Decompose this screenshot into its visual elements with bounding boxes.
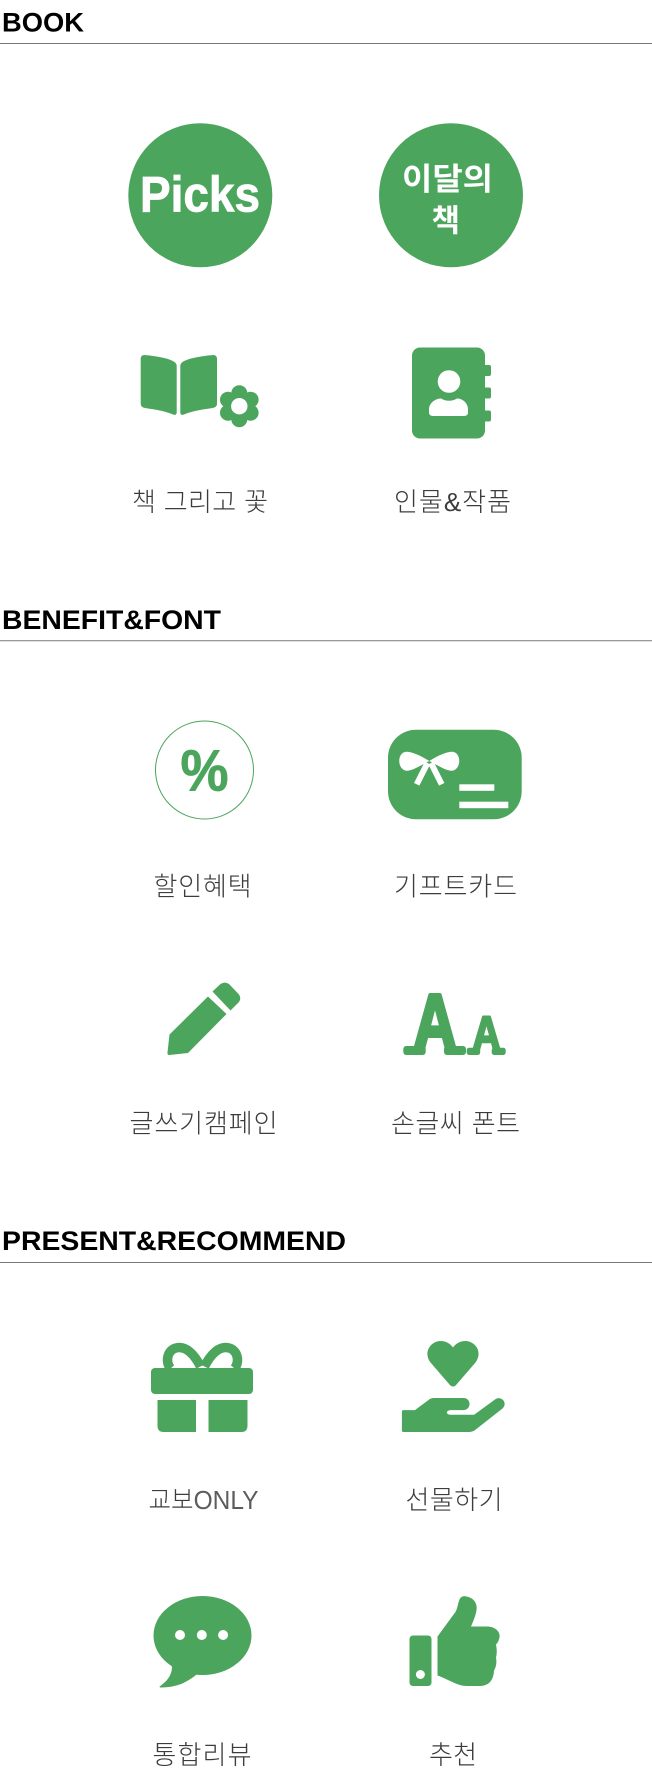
heading: BOOK: BOOK [2,8,85,38]
icon: thumbs up [410,1596,500,1686]
label: book and flower: 책 그리고 꽃 [132,487,268,517]
icon: Picks circle: Picks [140,167,260,223]
icon: gift card [388,730,522,819]
panel: benefit and font [0,605,652,1138]
icon: book of the month circle: 이달의 [402,162,493,197]
label: discount benefits: 할인혜택 [154,872,252,902]
icon: book of the month circle [379,123,523,267]
icon: Picks circle [128,123,272,267]
icon: percent discount: % [180,738,228,804]
heading: PRESENT&RECOMMEND: PRESENT&RECOMMEND [2,1226,346,1256]
label: writing campaign: 글쓰기캠페인 [130,1108,278,1138]
label: Kyobo only: 교보ONLY [148,1485,258,1515]
icon: contacts book [412,348,491,438]
icon: letters Aa: A [472,1008,501,1062]
icon: heart in hand [402,1341,505,1432]
icon: book and flower [141,355,259,427]
icon: gift box [151,1348,253,1432]
label: send a gift: 선물하기 [406,1485,502,1515]
label: integrated reviews: 통합리뷰 [152,1740,252,1770]
icon: speech bubble [154,1596,252,1688]
label: people and works: 인물&작품 [394,487,511,517]
heading: BENEFIT&FONT: BENEFIT&FONT [2,605,222,635]
label: handwriting font: 손글씨 폰트 [391,1108,520,1138]
icon: letters Aa [403,978,506,1067]
panel: book [0,8,652,517]
icon: letters Aa: A [413,978,457,1067]
icon: book of the month circle: 책 [432,204,460,238]
icon: pencil [167,983,240,1055]
icon: percent discount [156,721,254,819]
panel: present and recommend [0,1226,652,1770]
label: recommend: 추천 [429,1740,477,1770]
label: gift card: 기프트카드 [394,872,517,902]
